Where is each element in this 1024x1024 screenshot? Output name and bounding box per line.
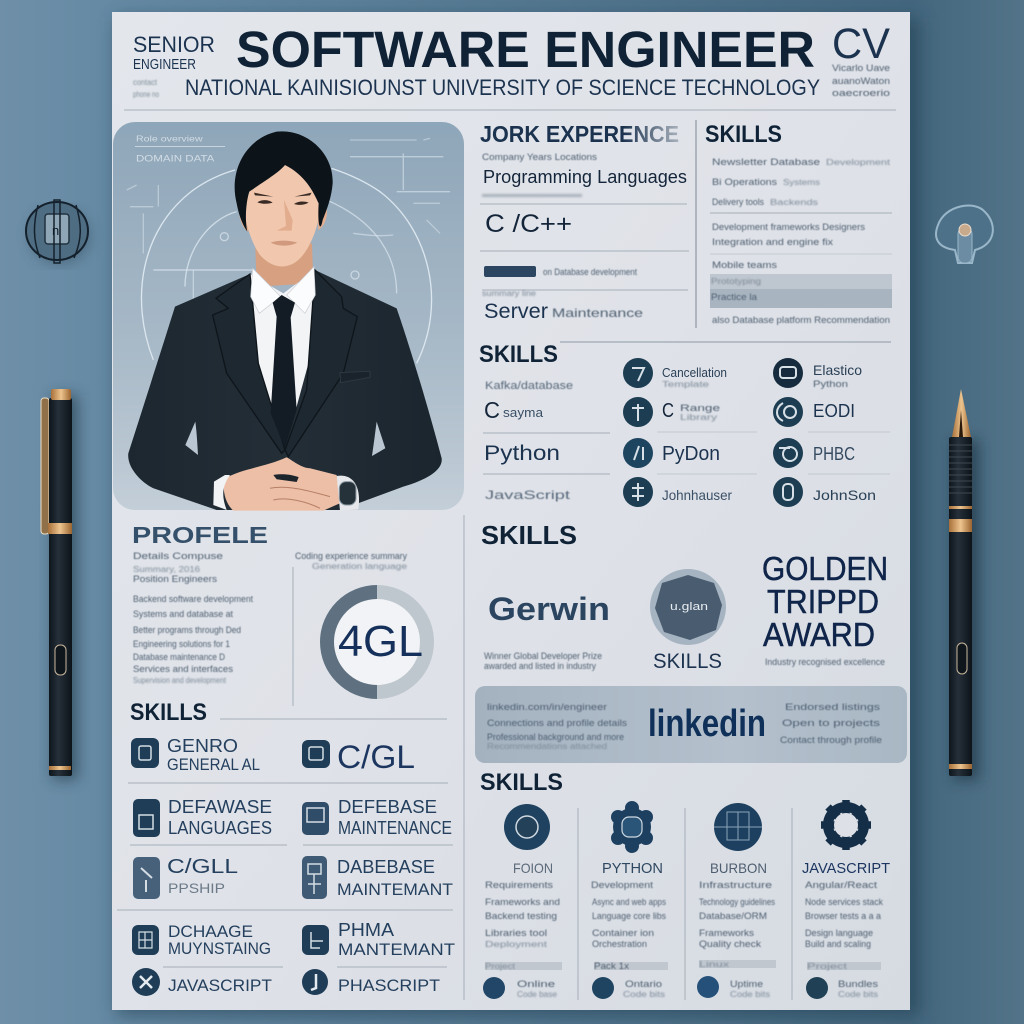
facial shadow [277,200,293,231]
university line: NATIONAL KAINISIOUNST UNIVERSITY OF SCIENCE TECHNOLOGY [185,75,820,100]
skills text rows: Mobile teams [712,260,778,270]
column: burbon: Technology guidelines [699,897,775,907]
profile text: Better programs through Ded [133,625,241,635]
panel: work experience: Company Years Locations [482,152,598,162]
programming languages: Programming Languages [483,167,687,187]
skills text rows: Integration and engine fix [712,237,834,247]
left pen [41,389,78,780]
skills text rows: Backends [770,198,818,207]
shaded skills bar [710,274,892,308]
title: SOFTWARE ENGINEER [236,21,815,78]
icon: pydon: PyDon [662,443,720,465]
senior engineer label: phone no [133,90,159,99]
footer skills note: also Database platform Recommendation [712,315,890,325]
column: burbon [697,803,776,999]
hands [224,457,340,511]
left skill rows: Kafka/database [485,380,573,392]
skill: database maintenant [302,856,453,899]
skill: dchaage [132,922,271,958]
icon: cancellation: Cancellation [662,365,727,380]
column: python: PYTHON [602,860,663,877]
panel: linkedin banner [475,686,907,763]
column: python: Development [591,880,654,890]
experience badge: on Database development [543,267,637,277]
column: javascript [802,800,890,999]
column: burbon: Quality check [699,939,762,949]
experience badge [484,266,637,277]
banner right text: Open to projects [782,718,881,728]
skills heading: SKILLS [130,699,207,726]
server maintenance: Server [484,300,548,323]
blueprint arcs [127,138,450,363]
icon: flower [504,804,550,850]
icon: johnson small [623,477,732,507]
icon: elastic [773,358,862,389]
column: python: Orchestration [592,939,647,949]
grip ribs [949,445,972,493]
suit jacket [128,270,442,510]
column: javascript: Design language [805,928,873,938]
paper clip right [936,206,993,263]
senior engineer label: ENGINEER [133,56,196,73]
contact details: Vicarlo Uave [832,63,890,73]
tie [271,295,297,448]
skills text rows: Bi Operations [712,177,778,187]
panel: skills icon grid [479,341,891,507]
profile text: Position Engineers [133,574,218,584]
column: burbon: Infrastructure [699,880,772,890]
skill: c/gll: PPSHIP [168,880,225,896]
blueprint label: DOMAIN DATA [136,154,215,164]
skill: dchaage: DCHAAGE [168,922,253,941]
header [124,20,896,110]
panel: bottom skills columns [480,769,890,1000]
hair [235,131,333,232]
left skill rows: Python [484,442,560,465]
shirt [250,270,317,452]
banner left text: Professional background and more [487,732,624,742]
skill: c/gl: C/GL [337,739,415,775]
skills heading: SKILLS [479,341,558,368]
column: foion: Code base [517,990,558,999]
icon: johnson [773,477,876,507]
contact details [832,63,890,98]
column: burbon: Database/ORM [699,911,767,921]
contact details: auanoWaton [832,76,890,86]
server maintenance [484,300,643,323]
profile heading: PROFELE [132,522,268,548]
lapels [213,270,357,457]
left skill rows: sayma [503,405,544,420]
column: javascript: Bundles [838,979,879,989]
skill: phma: PHMA [338,920,394,940]
banner right text [780,702,882,745]
chart: 4GL donut: 4GL [338,617,423,666]
senior engineer label: SENIOR [133,32,215,57]
column: javascript: JAVASCRIPT [802,860,890,877]
shirt cuff [213,475,230,510]
column: javascript: Node services stack [805,897,883,907]
panel: portrait [113,122,464,511]
finger lines [270,487,330,508]
profile text: Generation language [312,562,408,571]
skills text rows: Newsletter Database [712,157,820,167]
wristwatch [337,476,359,511]
column: python: Code bits [623,990,665,999]
photo background [113,122,464,510]
skill: phma [302,920,455,959]
icon: cog badge [611,801,653,853]
column: foion [483,804,562,999]
column: python: Language core libs [592,911,666,921]
skill: genro general [131,736,260,774]
left skill rows: JavaScript [485,488,571,502]
face [243,165,321,266]
profile text: Summary, 2016 [133,565,201,574]
skill: database maintenant: MAINTEMANT [337,880,453,899]
panel: left skills [117,699,455,996]
left skill rows: C [484,397,500,423]
c/c++: C /C++ [485,210,572,238]
skill: database languages: LANGUAGES [168,818,272,838]
skill: defebase maintenance: DEFEBASE [338,797,437,817]
column: burbon: Uptime [730,979,763,989]
skills heading: SKILLS [481,520,577,550]
banner left text: Recommendations attached [487,742,607,751]
profile text: Database maintenance D [133,652,225,662]
banner right text: Contact through profile [780,735,882,745]
skill: genro general: GENRO [167,736,238,756]
skill: defebase maintenance [302,797,452,838]
skill: c/gll: C/GLL [167,856,238,878]
icon: elastic: Elastico [813,362,862,378]
blueprint label: Role overview [136,134,204,144]
pen clip [41,398,49,534]
golden tripod award: GOLDEN [762,550,888,587]
profile text: Backend software development [133,594,253,604]
profile text: Services and interfaces [133,664,234,674]
column: burbon: Linux [699,960,729,969]
icon: johnson: JohnSon [813,487,876,503]
breast pocket [340,371,370,383]
column: foion: Deployment [485,940,548,949]
column: burbon: BURBON [710,860,767,876]
column: javascript: Browser tests a a a [805,911,881,921]
profile text: Details Compuse [133,551,223,561]
panel: top skills list [705,121,892,325]
icon: c range: C [662,400,674,422]
skill: database maintenant: DABEBASE [337,857,435,877]
banner left text: Connections and profile details [487,718,628,728]
profile text: Supervision and development [133,676,227,685]
column: burbon: Frameworks [699,928,755,938]
golden tripod award: TRIPPD [767,583,879,620]
neck [255,243,313,287]
column: burbon: Code bits [730,990,770,999]
gerwin award [484,591,610,671]
golden tripod award: Industry recognised excellence [765,657,885,667]
skill: database languages: DEFAWASE [168,797,272,817]
golden tripod award [762,550,888,667]
skills text rows: Development frameworks Designers [712,222,866,232]
server maintenance: Maintenance [552,306,643,320]
column: python: Pack 1x [594,961,630,971]
skills heading: SKILLS [480,769,563,796]
badge: u.glan [670,601,708,613]
skills text rows: Systems [783,178,820,187]
skill: javascript: JAVASCRIPT [168,976,272,995]
icon: c range [623,397,720,427]
icon: elastic: Python [813,379,848,389]
panel: profile [132,522,434,706]
fingers [273,474,299,482]
column: python: Async and web apps [592,897,666,907]
skills text rows: Development [826,158,891,167]
senior engineer label: contact [133,78,158,87]
golden tripod award: AWARD [763,616,875,653]
skill: phma: MANTEMANT [338,940,455,959]
panel: work experience [480,121,689,323]
panel: awards [481,520,888,673]
skill: dchaage: MUYNSTAING [168,939,271,958]
contact details: oaecroerio [832,88,890,98]
column: javascript: Build and scaling [805,939,871,949]
column: javascript: Angular/React [805,880,878,890]
column: python: Container ion [592,928,654,938]
cv mark: CV [832,20,890,68]
badge: SKILLS [653,650,722,673]
skill: javascript [132,968,272,996]
column: javascript: Project [807,962,848,971]
mouth [271,241,297,246]
banner left text: linkedin.com/in/engineer [487,702,607,712]
paper sheet [112,12,920,1016]
banner left text [487,702,628,751]
ears [239,202,327,232]
skills text rows: Delivery tools [712,197,764,207]
icon: cancellation: Template [662,380,710,389]
column: javascript: Code bits [838,990,878,999]
work experience heading: JORK EXPERENCE [480,121,679,147]
column: foion: Requirements [485,880,554,890]
paper clip left: n [52,223,59,238]
gerwin award: Winner Global Developer Prize [484,651,602,661]
column: foion: FOION [513,860,553,876]
profile text: Coding experience summary [295,551,407,561]
icon: c range: Library [680,413,717,422]
blueprint label [135,134,225,164]
icon: phbc: PHBC [813,444,855,464]
icon: eodi: EODI [813,401,855,421]
senior engineer label [133,32,215,99]
left skill rows [483,380,610,502]
skill: phascript: PHASCRIPT [338,976,440,995]
skill: c/gll [133,856,238,899]
column: python: Ontario [625,979,662,989]
icon: pydon [623,438,720,468]
shaded skills bar: Prototyping [711,277,761,286]
icon: eodi [773,397,855,427]
skills heading: SKILLS [705,121,782,148]
icon: c range: Range [680,403,720,413]
collar [251,267,315,313]
chart: 4GL donut [320,585,434,699]
icon: cancellation [623,358,727,389]
column: foion: Frameworks and [485,897,560,907]
skill: c/gl [302,739,415,775]
skill: genro general: GENERAL AL [167,755,260,774]
column: foion: Online [517,979,555,989]
profile text: Systems and database at [133,609,233,619]
gerwin award: Gerwin [488,591,610,627]
icon: globe [714,803,762,851]
skill: defebase maintenance: MAINTENANCE [338,818,452,838]
right pen [949,389,979,780]
column: foion: Project [485,962,516,971]
icon: gear [821,800,871,850]
profile text: Engineering solutions for 1 [133,639,230,649]
skill: phascript [302,969,440,995]
skills text rows [710,157,892,270]
shaded skills bar: Practice la [711,292,757,302]
banner right text: Endorsed listings [785,702,881,712]
skill: database languages [133,797,272,838]
panel: work experience: summary line [482,289,537,298]
icon: phbc [773,438,855,468]
paper clip left [26,200,90,264]
profile text [133,551,408,685]
column: foion: Libraries tool [485,928,547,938]
column: foion: Backend testing [485,911,557,921]
nib [952,389,971,437]
eyes [254,193,312,205]
icon: johnson small: Johnhauser [662,487,732,503]
gerwin award: awarded and listed in industry [484,661,596,671]
arm gaps [185,422,385,456]
column: python [591,801,668,999]
badge [650,569,726,673]
linkedin wordmark: linkedin [648,703,766,745]
